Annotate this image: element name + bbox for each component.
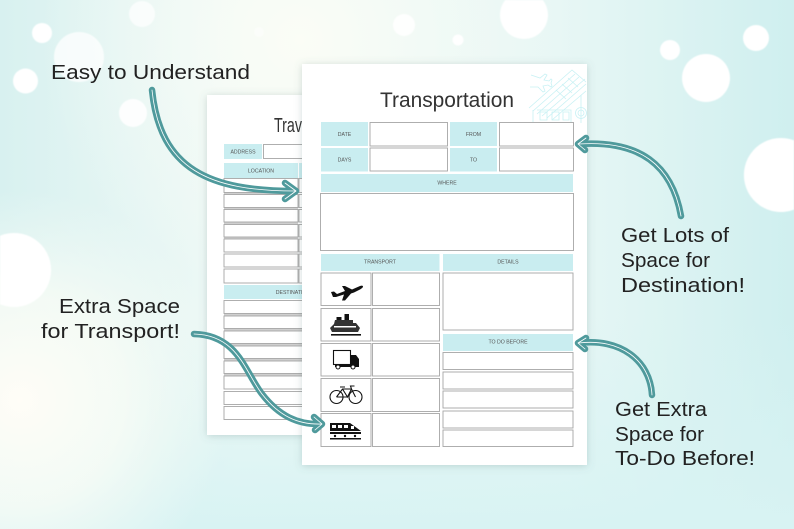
days row: TO (470, 158, 477, 164)
destination rows (224, 300, 314, 420)
icon: truck (334, 350, 359, 369)
panel: front page (302, 64, 587, 465)
label: lots of space for destination: Get Lots of (621, 224, 729, 247)
icon: plane (331, 286, 363, 300)
icon: ship (330, 314, 361, 336)
label: extra space for transport: for Transport! (41, 320, 180, 343)
arrow: lots of space for destination (578, 138, 681, 216)
destination header (224, 285, 314, 299)
white bubbles (0, 0, 794, 307)
label: extra space for transport: Extra Space (59, 295, 180, 318)
destination header: DESTINATION (276, 290, 310, 296)
arrow: extra space for transport (194, 334, 322, 430)
arrow: easy to understand (152, 90, 296, 199)
days row: DAYS (338, 158, 352, 164)
arrow: extra space for to-do before (578, 338, 652, 395)
label: lots of space for destination: Destination! (621, 274, 745, 297)
transport header (321, 254, 440, 271)
label: easy to understand: Easy to Understand (51, 61, 250, 84)
label: extra space for to-do before: To-Do Before! (615, 447, 755, 470)
panel: back page (207, 95, 327, 435)
transport header: TRANSPORT (364, 260, 397, 266)
label: extra space for to-do before (615, 398, 755, 470)
icon: train (330, 423, 361, 440)
location rows (224, 178, 309, 283)
address row (224, 144, 314, 159)
location header (224, 163, 309, 178)
where section (320, 174, 574, 250)
address row: ADDRESS (230, 150, 256, 156)
label: extra space for transport (41, 295, 180, 343)
date row: DATE (338, 132, 352, 138)
icon: bicycle (330, 386, 362, 404)
where section: WHERE (437, 180, 457, 186)
label: extra space for to-do before: Get Extra (615, 398, 708, 421)
icon: house and plane watermark (529, 70, 586, 123)
title: Transportation (380, 88, 514, 112)
days row (321, 148, 574, 172)
to do before section: TO DO BEFORE (488, 340, 528, 346)
date row: FROM (466, 132, 481, 138)
date row (321, 122, 574, 146)
to do before section (443, 334, 573, 446)
transport table (321, 273, 440, 446)
label: lots of space for destination (621, 224, 745, 297)
label: extra space for to-do before: Space for (615, 423, 704, 446)
label: lots of space for destination: Space for (621, 249, 710, 272)
details section (443, 254, 573, 330)
location header: LOCATION (248, 168, 274, 174)
back page title: Trav (274, 115, 302, 137)
details section: DETAILS (497, 260, 519, 266)
